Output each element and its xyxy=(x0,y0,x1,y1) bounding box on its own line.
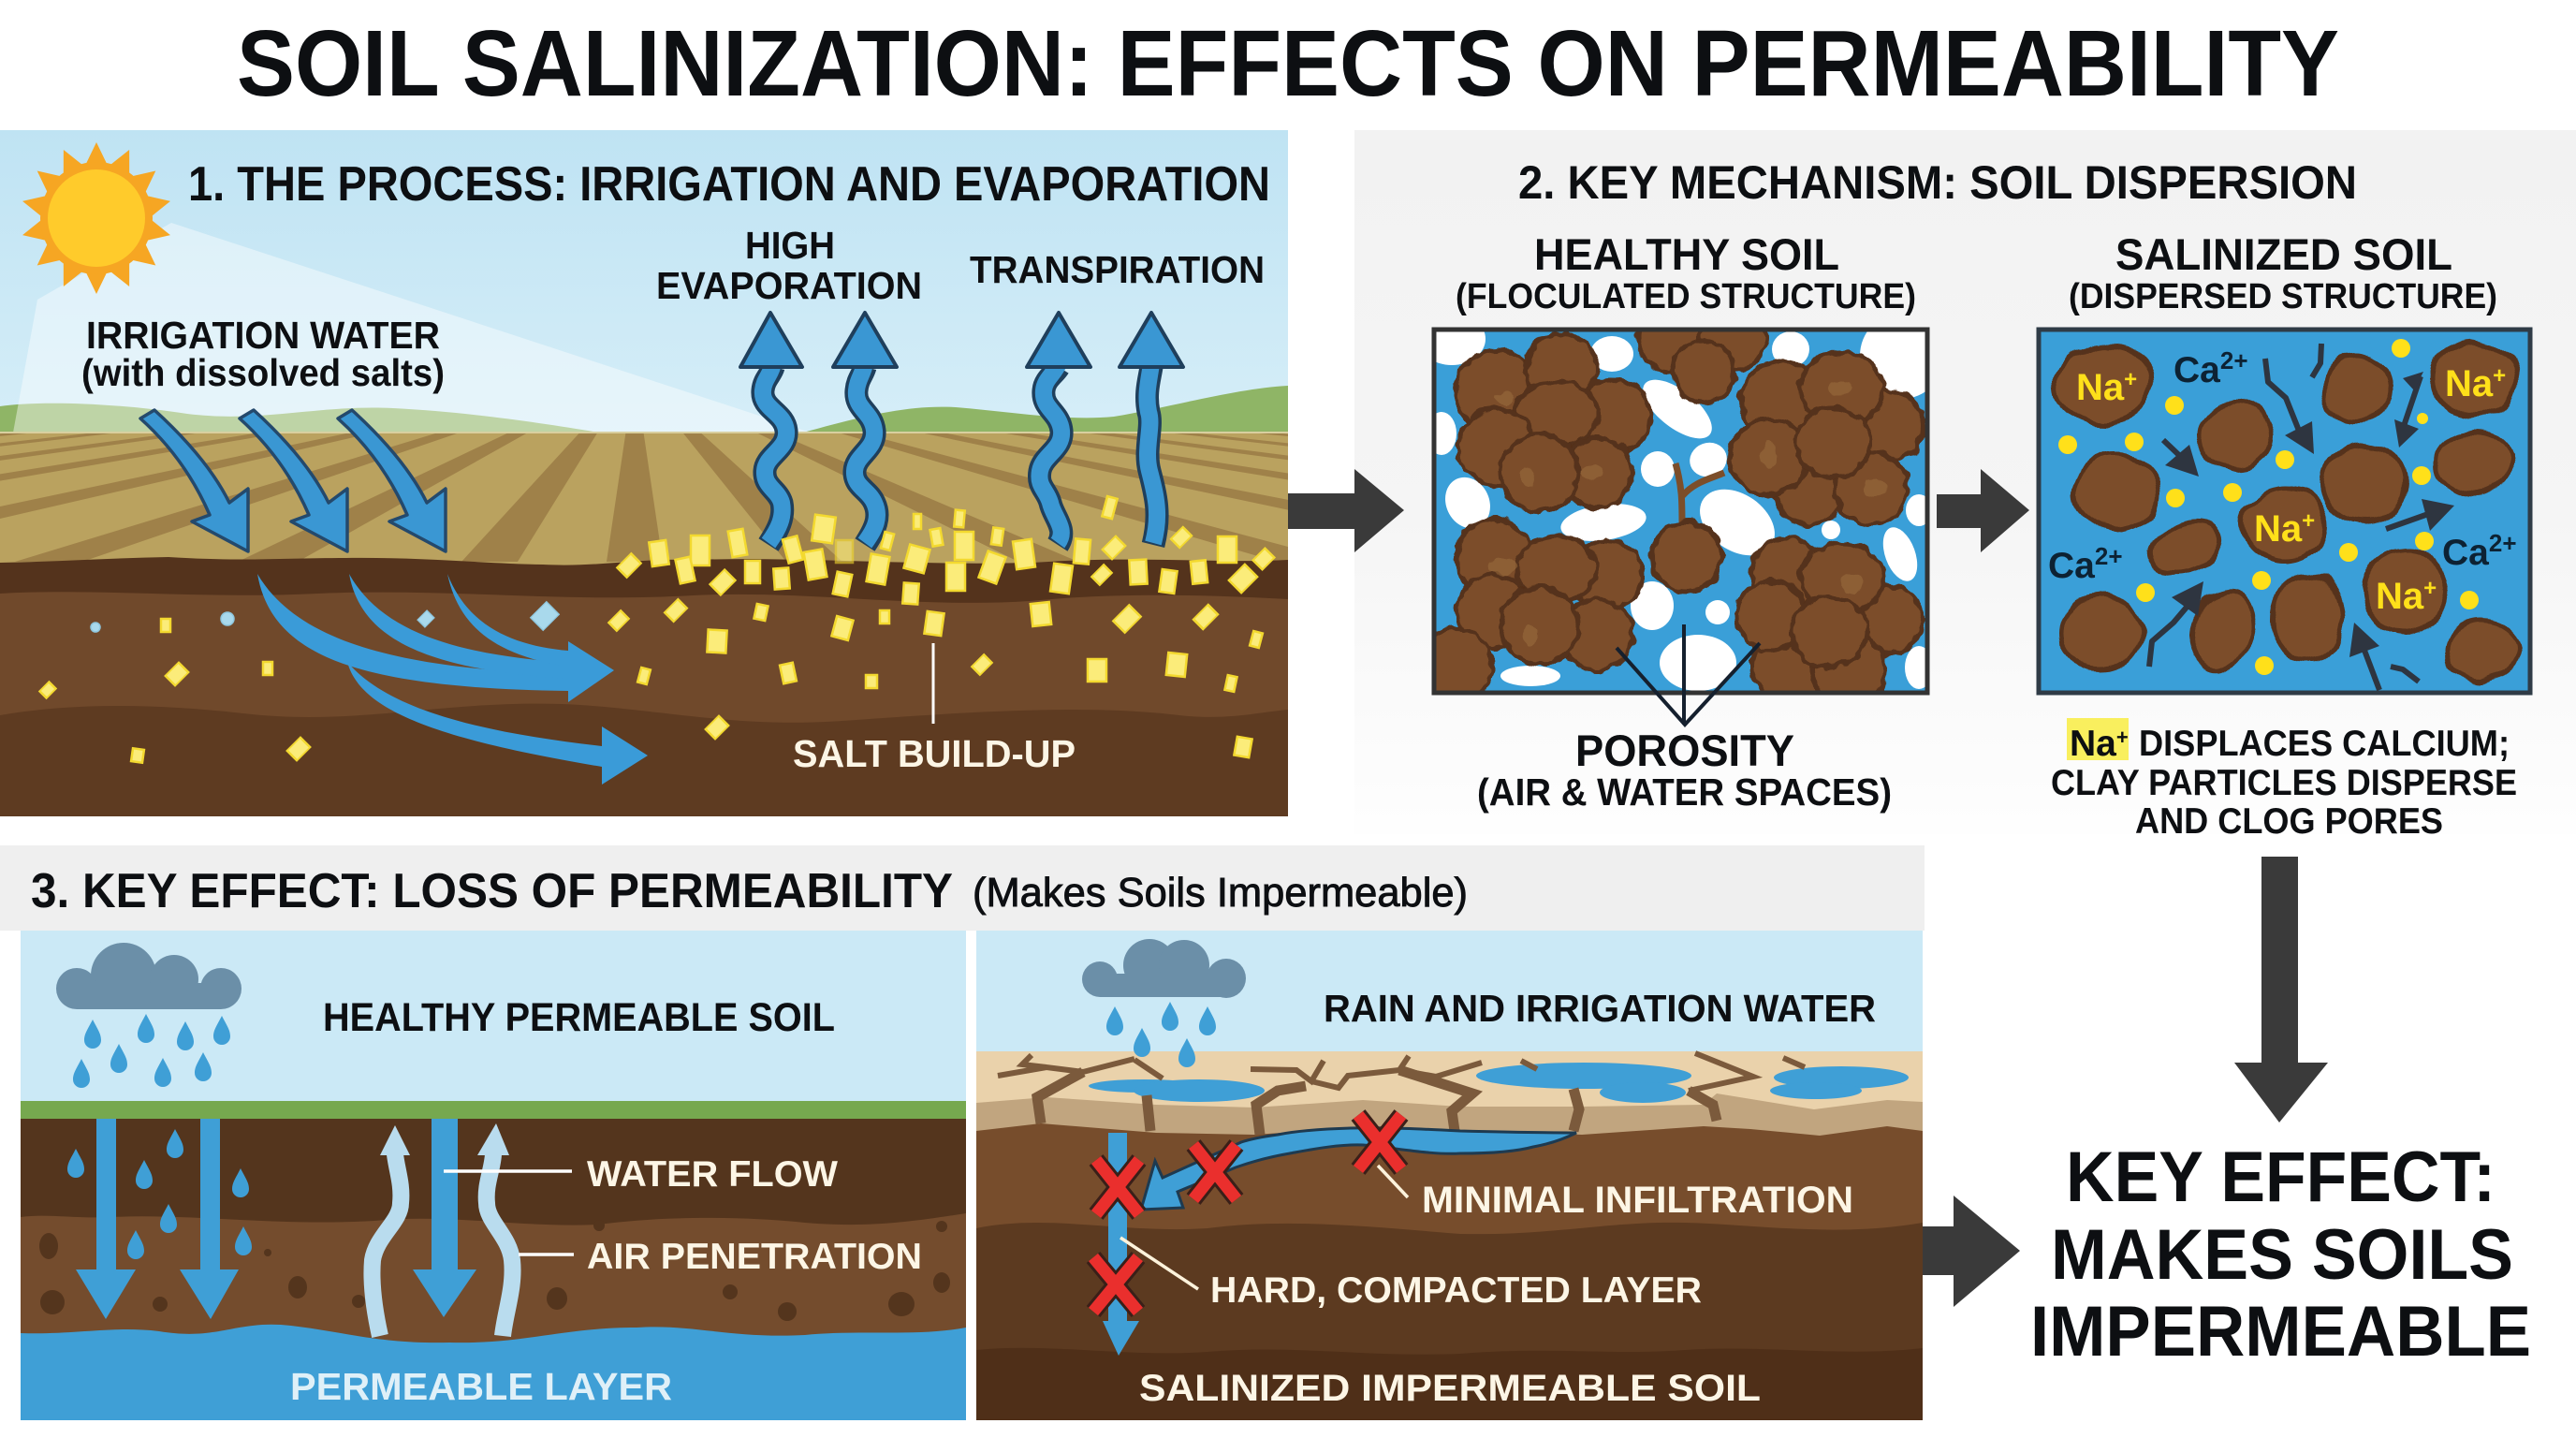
panel: salinized impermeable soil xyxy=(976,931,1923,1420)
heading: healthy permeable soil: HEALTHY PERMEABLE SOIL xyxy=(323,995,835,1040)
label: salinized impermeable soil: SALINIZED IMPERMEABLE SOIL xyxy=(1139,1368,1761,1409)
label: transpiration: TRANSPIRATION xyxy=(970,248,1265,291)
label: water flow: WATER FLOW xyxy=(587,1154,838,1195)
red x marks xyxy=(1093,1115,1401,1312)
label: hard compacted layer xyxy=(1120,1238,1702,1311)
deflected surface arrow xyxy=(1141,1128,1576,1210)
label: minimal infiltration: MINIMAL INFILTRATION xyxy=(1422,1180,1853,1221)
ion labels: + xyxy=(2423,576,2437,601)
ion labels: Ca xyxy=(2174,350,2220,390)
ion labels: 2+ xyxy=(2095,542,2123,570)
diagram: dispersed soil xyxy=(2037,328,2532,695)
arrows: evaporation wavy xyxy=(740,313,897,545)
ion labels: Na xyxy=(2254,508,2302,550)
title: SOIL SALINIZATION: EFFECTS ON PERMEABILITY xyxy=(237,11,2339,116)
yellow sodium dots xyxy=(2058,339,2479,675)
label: salinized soil xyxy=(2069,229,2497,316)
label: air penetration: AIR PENETRATION xyxy=(587,1237,922,1277)
floc cluster bottom right xyxy=(1736,537,1922,706)
ion labels: Na xyxy=(2445,363,2493,404)
arrow: mechanism down to effect xyxy=(2234,857,2328,1123)
arrows: transpiration wavy xyxy=(1027,313,1183,545)
water flow arrows xyxy=(76,1119,476,1319)
heading: panel 2: 2. KEY MECHANISM: SOIL DISPERSION xyxy=(1518,156,2357,209)
heading: panel 1: 1. THE PROCESS: IRRIGATION AND EVAPORATION xyxy=(188,157,1270,212)
floc cluster top left xyxy=(1456,334,1650,511)
ion labels: Na xyxy=(2076,367,2124,408)
icon: rain cloud xyxy=(56,943,242,1009)
arrows: water seeping underground xyxy=(257,574,648,785)
label: healthy soil xyxy=(1456,229,1916,316)
clay particles xyxy=(2056,341,2520,680)
ion labels xyxy=(2048,346,2517,617)
arrow: effect to conclusion xyxy=(1923,1196,2020,1307)
conclusion text: IMPERMEABLE xyxy=(2030,1292,2531,1372)
ion labels: 2+ xyxy=(2489,529,2517,557)
callout: porosity: (AIR & WATER SPACES) xyxy=(1477,770,1892,814)
ion labels: 2+ xyxy=(2220,346,2248,374)
icon: rain cloud xyxy=(1082,939,1246,998)
ion labels: Ca xyxy=(2048,546,2095,586)
panel: 3 header: (Makes Soils Impermeable) xyxy=(973,870,1468,916)
conclusion text: KEY EFFECT: xyxy=(2066,1137,2496,1217)
conclusion text xyxy=(2030,1137,2531,1372)
text: displacement explanation: CLAY PARTICLES DISPERSE xyxy=(2051,763,2517,803)
blocked vertical arrow xyxy=(1103,1133,1139,1356)
puddles xyxy=(1089,1063,1909,1103)
label: salinized soil: (DISPERSED STRUCTURE) xyxy=(2069,277,2497,316)
label: irrigation water: IRRIGATION WATER xyxy=(86,314,440,357)
panel: 2 background xyxy=(1354,130,2576,834)
label: irrigation water: (with dissolved salts) xyxy=(81,351,445,394)
label: minimal infiltration xyxy=(1378,1166,1853,1221)
cracks xyxy=(998,1053,1805,1135)
rain drops xyxy=(73,1014,230,1088)
panel: 3 header xyxy=(0,845,1925,931)
text: displacement explanation: Na xyxy=(2070,724,2116,764)
label: salinized soil: SALINIZED SOIL xyxy=(2115,229,2452,279)
label: irrigation water xyxy=(81,314,445,394)
panel: healthy permeable soil xyxy=(21,931,966,1420)
migration arrows xyxy=(2149,344,2454,690)
label: hard compacted layer: HARD, COMPACTED LAYER xyxy=(1210,1270,1702,1311)
heading: rain and irrigation water: RAIN AND IRRIGATION WATER xyxy=(1324,987,1876,1030)
air penetration arrows xyxy=(372,1123,513,1336)
panel: 1 the process xyxy=(0,130,1288,816)
rain drops xyxy=(1106,1002,1216,1067)
floc cluster top right xyxy=(1731,352,1924,525)
pebbles xyxy=(39,1220,950,1321)
panel: 3 header: 3. KEY EFFECT: LOSS OF PERMEABILITY xyxy=(31,864,953,918)
callout: porosity: POROSITY xyxy=(1575,726,1794,775)
label: high evaporation: HIGH xyxy=(745,224,835,267)
floc cluster bottom left xyxy=(1456,520,1642,670)
label: healthy soil: HEALTHY SOIL xyxy=(1534,229,1839,279)
text: displacement explanation xyxy=(2051,718,2517,842)
conclusion text: MAKES SOILS xyxy=(2051,1215,2513,1295)
label: permeable layer: PERMEABLE LAYER xyxy=(290,1365,672,1408)
ion labels: + xyxy=(2493,363,2506,389)
label: high evaporation: EVAPORATION xyxy=(656,264,922,307)
callout: porosity xyxy=(1477,624,1892,814)
text: displacement explanation: AND CLOG PORES xyxy=(2135,801,2443,842)
soil water drops xyxy=(67,1129,252,1259)
arrow: healthy to salinized xyxy=(1937,469,2029,552)
ion labels: + xyxy=(2302,508,2315,534)
diagram: flocculated soil xyxy=(1432,328,1930,695)
callout: salt build-up: SALT BUILD-UP xyxy=(793,732,1076,775)
arrow: process to mechanism xyxy=(1288,469,1404,552)
cracked crust xyxy=(976,1051,1923,1136)
text: displacement explanation: DISPLACES CALCIUM; xyxy=(2139,724,2510,764)
ion labels: Na xyxy=(2376,576,2423,617)
salt crystals xyxy=(39,496,1274,763)
ion labels: + xyxy=(2124,367,2137,392)
text: displacement explanation: + xyxy=(2116,726,2129,749)
icon: sun xyxy=(20,142,173,294)
ion labels: Ca xyxy=(2442,533,2489,573)
arrows: irrigation water down xyxy=(140,410,446,551)
label: healthy soil: (FLOCULATED STRUCTURE) xyxy=(1456,277,1916,316)
label: high evaporation xyxy=(656,224,922,307)
